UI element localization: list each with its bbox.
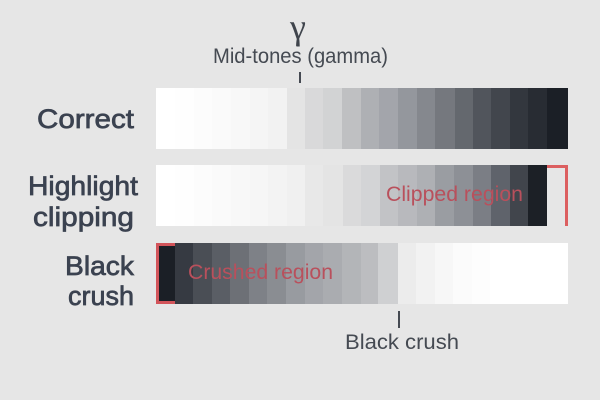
callout: crushed region bracket xyxy=(158,244,175,302)
marker: black crush tick xyxy=(398,311,400,328)
panel: correct gradient bar xyxy=(156,88,568,149)
label: Highlight clipping: clipping xyxy=(33,202,134,232)
marker: mid-tones tick xyxy=(299,72,301,83)
panel: highlight clipping gradient bar xyxy=(156,165,547,226)
label: Black crush: crush xyxy=(68,281,134,311)
label: Black crush xyxy=(65,251,135,311)
label: Highlight clipping: Highlight xyxy=(28,171,139,201)
callout: crushed region text: Crushed region xyxy=(188,261,333,284)
label: Highlight clipping xyxy=(28,171,139,232)
callout: clipped region bracket xyxy=(547,166,566,226)
icon: gamma symbol: γ xyxy=(289,7,306,47)
callout: clipped region text: Clipped region xyxy=(386,183,523,206)
label: Black crush: Black xyxy=(65,251,135,281)
heading: mid-tones label: Mid-tones (gamma) xyxy=(213,45,388,68)
panel: black crush gradient bar xyxy=(156,243,568,304)
label: black crush caption: Black crush xyxy=(345,331,459,354)
label: Correct: Correct xyxy=(37,104,135,134)
